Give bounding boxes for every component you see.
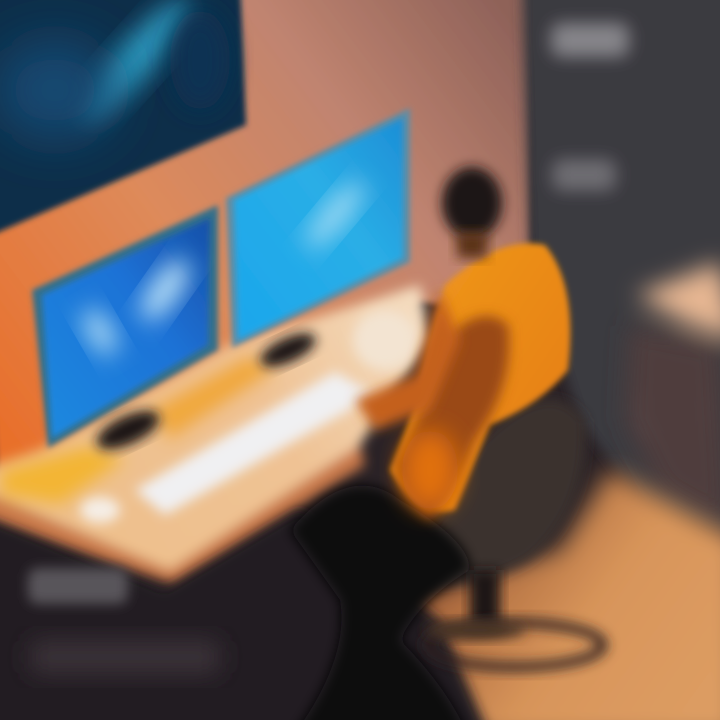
panel: desk	[0, 285, 430, 585]
panel: floor	[400, 470, 720, 720]
person: head	[442, 167, 502, 239]
person: orange shirt	[390, 243, 570, 512]
keyboard	[80, 310, 417, 523]
person: legs	[290, 485, 470, 720]
person: shirt shadow	[395, 316, 509, 520]
panel: dark lower-left foreground	[0, 510, 490, 720]
office chair	[400, 399, 603, 667]
person	[290, 167, 570, 720]
panel: side cabinet top	[625, 262, 720, 530]
monitor: left	[32, 205, 218, 457]
wall poster: blue data screen	[0, 0, 246, 240]
person: neck	[457, 232, 487, 258]
monitor: right	[226, 108, 410, 374]
panel: dark filing cabinet wall	[522, 0, 720, 540]
person: arm	[355, 290, 460, 430]
person: lower shirt glow	[402, 430, 458, 510]
